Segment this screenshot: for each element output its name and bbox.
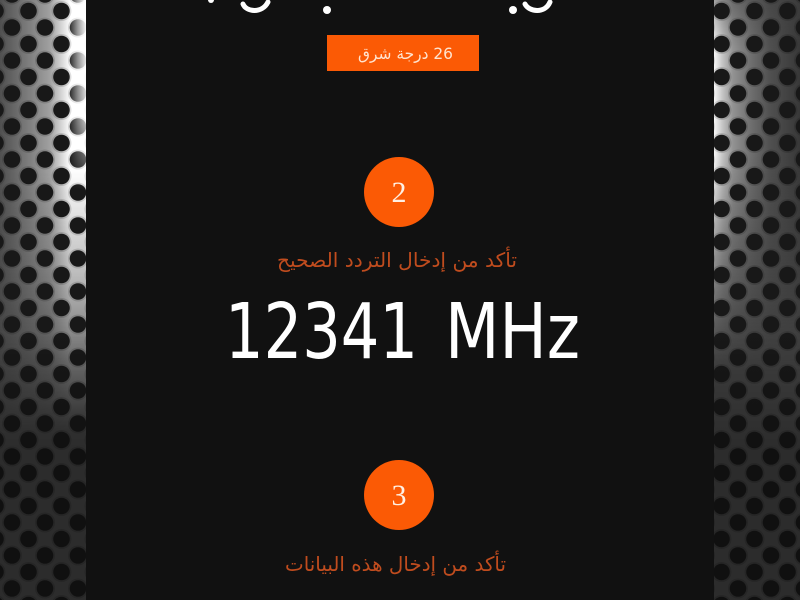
step 2 instruction: تأكد من إدخال التردد الصحيح — [277, 246, 517, 273]
step 3 number circle: 3 — [392, 479, 406, 512]
frequency value — [225, 288, 580, 377]
heading: cropped title fragments — [208, 0, 550, 14]
step 3 instruction: تأكد من إدخال هذه البيانات — [285, 550, 506, 577]
step 2 number circle — [364, 157, 434, 227]
badge: 26 degrees east — [327, 35, 479, 71]
central dark panel — [86, 0, 714, 600]
badge: 26 degrees east: 26 درجة شرق — [358, 44, 453, 64]
frequency value: MHz — [445, 288, 580, 377]
step 2 number circle: 2 — [392, 176, 406, 209]
step 3 number circle — [364, 460, 434, 530]
frequency value: 12341 — [225, 288, 418, 377]
